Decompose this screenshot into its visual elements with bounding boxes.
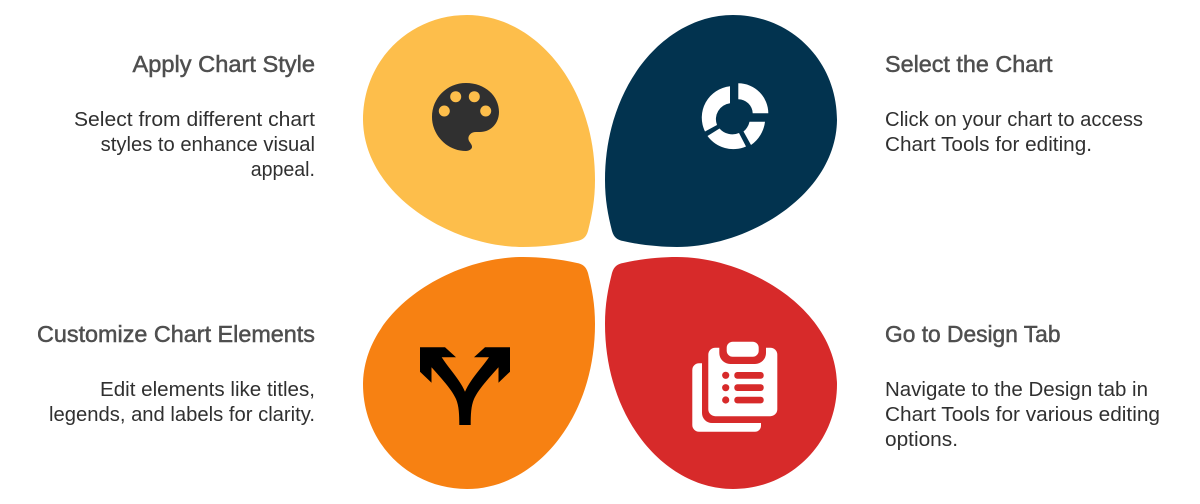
- text block: apply chart style: [74, 51, 315, 181]
- description: go to design tab: Chart Tools for various editing: [885, 404, 1160, 426]
- panel: select the chart petal: [605, 15, 837, 247]
- description: apply chart style: appeal.: [251, 159, 315, 181]
- description: customize chart elements: Edit elements like titles,: [100, 379, 315, 401]
- icon: forked arrow: [420, 347, 510, 425]
- heading: customize chart elements: Customize Chart Elements: [37, 321, 315, 347]
- description: select the chart: Click on your chart to access: [885, 109, 1143, 131]
- panel: customize chart elements petal: [363, 257, 595, 489]
- heading: go to design tab: Go to Design Tab: [885, 321, 1060, 347]
- description: go to design tab: Navigate to the Design tab in: [885, 379, 1148, 401]
- description: apply chart style: styles to enhance visual: [101, 134, 315, 156]
- description: go to design tab: options.: [885, 429, 958, 451]
- description: select the chart: [885, 109, 1143, 156]
- description: customize chart elements: legends, and labels for clarity.: [49, 404, 315, 426]
- description: customize chart elements: [49, 379, 315, 426]
- description: apply chart style: Select from different chart: [74, 109, 315, 131]
- heading: apply chart style: Apply Chart Style: [132, 51, 315, 77]
- text block: go to design tab: [885, 321, 1160, 451]
- icon: donut chart: [702, 83, 768, 149]
- icon: paint palette: [432, 83, 499, 151]
- text block: customize chart elements: [37, 321, 315, 426]
- heading: select the chart: Select the Chart: [885, 51, 1053, 77]
- description: select the chart: Chart Tools for editing.: [885, 134, 1092, 156]
- panel: apply chart style petal: [363, 15, 595, 247]
- icon: clipboard list: [692, 342, 777, 432]
- description: go to design tab: [885, 379, 1160, 451]
- text block: select the chart: [885, 51, 1143, 156]
- description: apply chart style: [74, 109, 315, 181]
- panel: go to design tab petal: [605, 257, 837, 489]
